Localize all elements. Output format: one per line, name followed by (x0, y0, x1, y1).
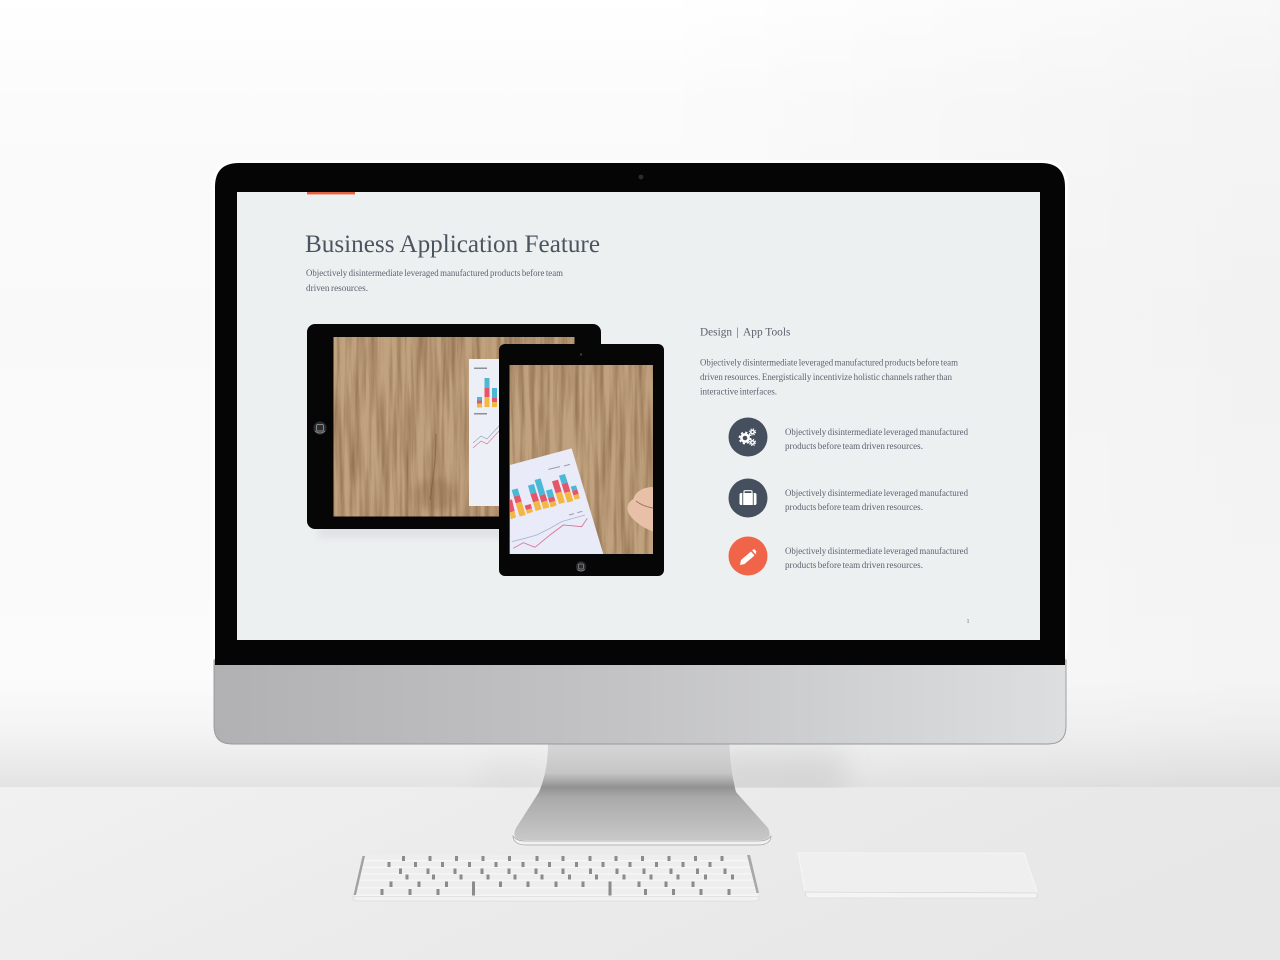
black bezel (215, 163, 1065, 665)
portrait tablet (499, 344, 664, 576)
section paragraph (700, 358, 958, 398)
feature row: briefcase (728, 478, 968, 518)
bar chart (510, 474, 580, 519)
feature text: Objectively disintermediate leveraged manufactured (785, 488, 968, 499)
section heading: | (736, 324, 739, 338)
screen background (237, 192, 1040, 640)
section heading (700, 324, 791, 338)
feature text: products before team driven resources. (785, 560, 923, 571)
icon: pencil (728, 536, 768, 576)
tablet shadow (318, 526, 508, 538)
paper with chart (469, 359, 500, 506)
section paragraph: Objectively disintermediate leveraged manufactured products before team (700, 358, 958, 368)
stand shadow on wall (730, 747, 844, 788)
home button (576, 561, 586, 572)
feature text (785, 427, 968, 452)
chart legend marks (548, 464, 582, 515)
aluminium chin (214, 660, 1066, 744)
line chart (513, 518, 587, 548)
section paragraph: driven resources. Energistically incentivize holistic channels rather than (700, 372, 952, 383)
tablet photo: wood (334, 337, 574, 516)
page number: 1 (966, 619, 970, 625)
subtitle text: Objectively disintermediate leveraged manufactured products before team (306, 268, 563, 279)
feature row: gears (728, 418, 968, 456)
subtitle text: driven resources. (306, 283, 368, 294)
feature text: Objectively disintermediate leveraged manufactured (785, 546, 968, 557)
home button (314, 422, 326, 434)
trackpad (798, 853, 1037, 898)
webcam (639, 175, 643, 179)
feature text: products before team driven resources. (785, 502, 923, 513)
key rows (355, 860, 757, 896)
feature text (785, 488, 968, 513)
icon: gears (728, 418, 768, 456)
subtitle text (306, 268, 563, 294)
monitor (212, 160, 1068, 744)
feature text: products before team driven resources. (785, 441, 923, 452)
monitor halo (212, 160, 1068, 670)
icon: briefcase (728, 478, 768, 518)
feature text: Objectively disintermediate leveraged manufactured (785, 427, 968, 438)
tablet photo: wood (510, 365, 653, 554)
hand (627, 487, 653, 532)
section heading: Design (700, 324, 732, 338)
section paragraph: interactive interfaces. (700, 386, 777, 398)
slide accent bar (307, 192, 355, 194)
section heading: App Tools (743, 324, 791, 338)
key gaps (380, 856, 734, 896)
monitor stand (513, 744, 771, 845)
feature row: pencil (728, 536, 968, 576)
title: Business Application Feature (305, 229, 600, 258)
landscape tablet (307, 324, 601, 529)
paper with chart (510, 448, 603, 554)
feature text (785, 546, 968, 571)
desk surface (0, 787, 1280, 960)
front camera (580, 353, 582, 356)
keyboard (353, 855, 759, 901)
